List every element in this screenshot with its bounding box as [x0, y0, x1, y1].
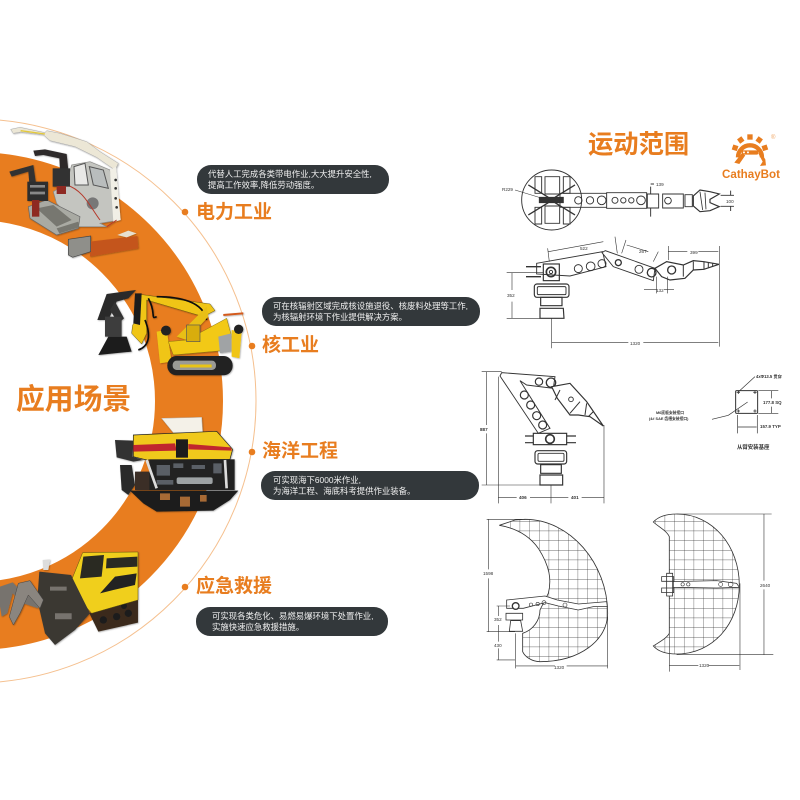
dimension labels: M6底板安装接口	[656, 410, 684, 415]
drawing: side reach envelope	[487, 519, 608, 668]
dimension labels: 352	[507, 293, 515, 298]
heading: marine engineering: 海洋工程	[262, 441, 338, 462]
robot: nuclear industry	[97, 290, 243, 375]
text: marine engineering	[261, 471, 479, 500]
text: emergency rescue: 可实现各类危化、易燃易爆环境下处置作业,	[212, 610, 373, 620]
text: marine engineering: 可实现海下6000米作业,	[273, 474, 361, 484]
dimension labels: 2640	[760, 583, 771, 588]
text: emergency rescue: 实施快速应急救援措施。	[212, 622, 304, 632]
dimension labels	[480, 182, 782, 670]
logo registered mark: ®	[771, 134, 776, 141]
text: nuclear industry: 为核辐射环境下作业提供解决方案。	[273, 312, 407, 322]
dimension labels: 100	[726, 199, 734, 204]
dimension labels: (4# SAE 齿槽安装接口)	[649, 416, 689, 421]
dimension labels: 522	[580, 246, 588, 251]
dimension labels: 4xΦ13.5 贯穿	[756, 373, 782, 380]
robot: power industry	[9, 127, 138, 257]
heading: power industry: 电力工业	[196, 202, 272, 223]
logo gear	[732, 134, 768, 166]
drawing: top reach envelope	[653, 514, 773, 672]
text: nuclear industry	[262, 297, 480, 326]
dimension labels: 430	[494, 643, 502, 648]
dimension labels: 1320	[699, 663, 710, 668]
dimension labels: 887	[480, 427, 488, 432]
heading: emergency rescue: 应急救援	[196, 576, 272, 597]
orange arc band	[0, 186, 189, 616]
section heading: motion range: 运动范围	[588, 131, 689, 159]
dimension labels: 1320	[554, 665, 565, 670]
thin outer arc	[0, 119, 256, 683]
dimension labels: 157.9 TYP	[760, 424, 781, 429]
text: power industry: 提高工作效率,降低劳动强度。	[208, 180, 319, 190]
text: power industry	[197, 165, 389, 194]
dimension labels: 177.8 SQ	[763, 400, 782, 405]
dimension labels: 399	[690, 250, 698, 255]
drawing: mounting base	[712, 377, 778, 433]
timeline dots	[182, 209, 255, 590]
dimension labels: 132	[656, 288, 664, 293]
heading: nuclear industry: 核工业	[262, 335, 319, 356]
text: emergency rescue	[196, 607, 388, 636]
drawing: side view of arm	[507, 237, 719, 348]
text: marine engineering: 为海洋工程、海底科考提供作业装备。	[273, 486, 415, 496]
main heading: 应用场景	[16, 384, 131, 416]
dimension labels: 139	[656, 182, 664, 187]
text: power industry: 代替人工完成各类带电作业,大大提升安全性,	[208, 168, 372, 178]
robot: emergency rescue	[0, 552, 138, 645]
dimension labels: 1598	[483, 571, 494, 576]
logo wordmark: CathayBot	[722, 168, 780, 181]
drawing: front view of arm	[482, 372, 604, 503]
dimension labels: 1320	[630, 341, 641, 346]
dimension labels: 406	[519, 495, 527, 500]
dimension labels: R229	[502, 187, 513, 192]
dimension labels: 从臂安装基座	[737, 443, 770, 451]
dimension labels: 401	[571, 495, 579, 500]
dimension labels: 352	[494, 617, 502, 622]
dimension labels: 267	[639, 249, 647, 254]
text: nuclear industry: 可在核辐射区域完成核设施退役、核废料处理等工作,	[273, 300, 468, 310]
drawing: top view of arm	[515, 170, 734, 230]
robot: marine engineering	[115, 417, 238, 512]
